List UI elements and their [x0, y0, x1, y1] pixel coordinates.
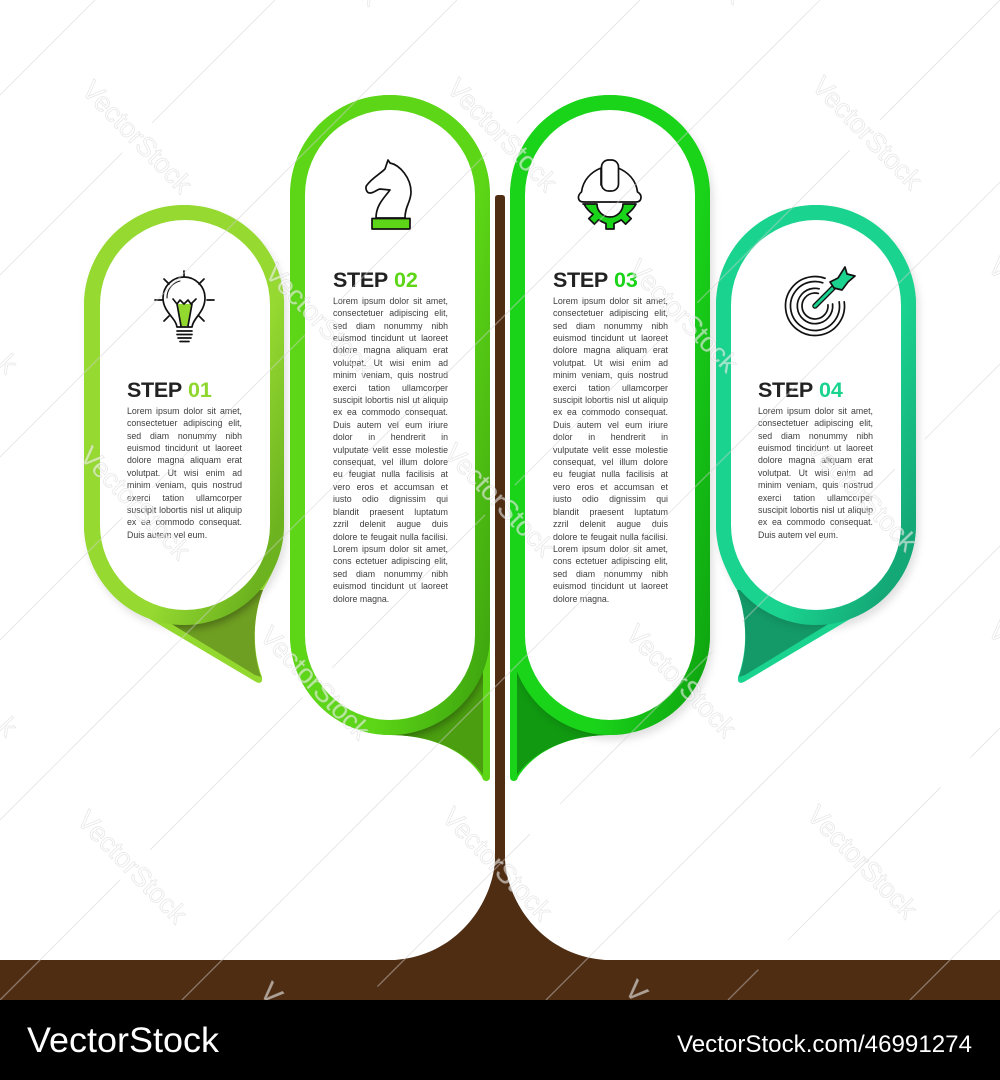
leaf tail: step 01 — [84, 205, 285, 683]
text block: step 02: cons ectetuer adipiscing elit, — [333, 556, 448, 566]
panel: step 02 — [290, 95, 490, 781]
watermark overlay: VectorStock — [806, 71, 928, 196]
watermark overlay: VectorStock — [801, 433, 923, 558]
text block: step 02: dolore magna. — [333, 594, 389, 604]
text block: step 03: cons ectetuer adipiscing elit, — [553, 556, 668, 566]
text block: step 03: eu feugiat nulla facilisis at — [553, 469, 668, 479]
text block: step 02: Lorem ipsum dolor sit amet, — [333, 544, 448, 554]
watermark overlay: VectorStock — [622, 254, 744, 379]
text block: step 02: consectetuer adipiscing elit, — [333, 308, 448, 318]
text block: step 04: minim veniam, quis nostrud — [758, 480, 873, 490]
text block: step 04 — [758, 406, 873, 540]
text block: step 01: Duis autem vel eum. — [127, 530, 207, 540]
text block: step 04: euismod tincidunt ut laoreet — [758, 443, 873, 453]
watermark overlay: VectorStock — [436, 802, 558, 927]
text block: step 01: ex ea commodo consequat. — [127, 517, 242, 527]
panel: step 01 — [84, 205, 290, 683]
text block: step 03: Duis autem vel eum iriure — [553, 420, 668, 430]
watermark overlay: VectorStock — [74, 441, 196, 566]
ring: step 04 — [716, 205, 916, 625]
text block: step 02: Lorem ipsum dolor sit amet, — [333, 296, 448, 306]
text block: step 01 — [127, 406, 242, 540]
text block: step 03: vulputate velit esse molestie — [553, 445, 668, 455]
text block: step 02: suscipit lobortis nisl ut aliquip — [333, 395, 448, 405]
text block: step 03: suscipit lobortis nisl ut aliquip — [553, 395, 668, 405]
text block: step 01: sed diam nonummy nibh — [127, 431, 242, 441]
watermark overlay: VectorStock — [71, 805, 193, 930]
text block: step 04: Duis autem vel eum. — [758, 530, 838, 540]
text block: step 01: dolore magna aliquam erat — [127, 455, 242, 465]
text block: step 01: euismod tincidunt ut laoreet — [127, 443, 242, 453]
text block: step 02: dolore te feugait nulla facilisi. — [333, 532, 448, 542]
text block: step 03: vero eros et accumsan et — [553, 482, 668, 492]
leaf tail: step 03 — [510, 95, 711, 781]
text block: step 03: minim veniam, quis nostrud — [553, 370, 668, 380]
watermark overlay: VectorStock — [441, 73, 563, 198]
icon: chess knight — [366, 160, 411, 229]
text block: step 02: sed diam nonummy nibh — [333, 321, 448, 331]
text block: step 01: consectetuer adipiscing elit, — [127, 418, 242, 428]
text block: step 01: Lorem ipsum dolor sit amet, — [127, 406, 242, 416]
text block: step 02: sed diam nonummy nibh — [333, 569, 448, 579]
watermark overlay: VectorStock — [76, 75, 198, 200]
text block: step 03: dolore magna aliquam erat — [553, 345, 668, 355]
text block: step 02: euismod tincidunt ut laoreet — [333, 581, 448, 591]
text block: step 02: consequat, vel illum dolore — [333, 457, 448, 467]
panel: step 03 — [510, 95, 716, 781]
text block: step 03: blandit praesent luptatum — [553, 507, 668, 517]
text block: step 04: exerci tation ullamcorper — [758, 493, 873, 503]
text block: step 03: exerci tation ullamcorper — [553, 383, 668, 393]
ring: step 02 — [290, 95, 490, 735]
icon: helmet and gear — [578, 160, 641, 229]
text block: step 04: volutpat. Ut wisi enim ad — [758, 468, 873, 478]
heading: step 04: STEP 04 — [758, 378, 843, 402]
text block: step 02: vero eros et accumsan et — [333, 482, 448, 492]
footer band — [0, 1000, 1000, 1080]
text block: step 01: suscipit lobortis nisl ut aliquip — [127, 505, 242, 515]
text block: step 02: dolor in hendrerit in — [333, 432, 448, 442]
footer logo text: VectorStock — [27, 1021, 220, 1060]
watermark overlay: VectorStock — [620, 619, 742, 744]
text block: step 02: eu feugiat nulla facilisis at — [333, 469, 448, 479]
text block: step 02: euismod tincidunt ut laoreet — [333, 333, 448, 343]
ring: step 01 — [84, 205, 284, 625]
text block: step 04: consectetuer adipiscing elit, — [758, 418, 873, 428]
leaf tail: step 02 — [290, 95, 491, 781]
text block: step 03: dolore magna. — [553, 594, 609, 604]
text block: step 04: sed diam nonummy nibh — [758, 431, 873, 441]
watermark overlay: VectorStock — [438, 438, 560, 563]
text block: step 04: suscipit lobortis nisl ut aliquip — [758, 505, 873, 515]
text block: step 01: volutpat. Ut wisi enim ad — [127, 468, 242, 478]
text block: step 02: dolore magna aliquam erat — [333, 345, 448, 355]
panel: step 04 — [716, 205, 922, 683]
text block: step 03: sed diam nonummy nibh — [553, 321, 668, 331]
text block: step 02: exerci tation ullamcorper — [333, 383, 448, 393]
text block: step 03: volutpat. Ut wisi enim ad — [553, 358, 668, 368]
text block: step 03: consectetuer adipiscing elit, — [553, 308, 668, 318]
text block: step 02: iusto odio dignissim qui — [333, 494, 448, 504]
heading: step 02: STEP 02 — [333, 268, 418, 292]
text block: step 04: dolore magna aliquam erat — [758, 455, 873, 465]
watermark overlay: VectorStock — [254, 621, 376, 746]
text block: step 02: minim veniam, quis nostrud — [333, 370, 448, 380]
text block: step 02: Duis autem vel eum iriure — [333, 420, 448, 430]
icon: light bulb — [155, 271, 214, 342]
text block: step 03: Lorem ipsum dolor sit amet, — [553, 544, 668, 554]
text block: step 03: consequat, vel illum dolore — [553, 457, 668, 467]
text block: step 02: volutpat. Ut wisi enim ad — [333, 358, 448, 368]
text block: step 02: zzril delenit augue duis — [333, 519, 448, 529]
text block: step 02: ex ea commodo consequat. — [333, 407, 448, 417]
watermark overlay: VectorStock — [801, 800, 923, 925]
text block: step 02: blandit praesent luptatum — [333, 507, 448, 517]
text block: step 01: minim veniam, quis nostrud — [127, 480, 242, 490]
text block: step 03 — [553, 296, 668, 604]
text block: step 03: Lorem ipsum dolor sit amet, — [553, 296, 668, 306]
text block: step 01: exerci tation ullamcorper — [127, 493, 242, 503]
heading: step 01: STEP 01 — [127, 378, 212, 402]
text block: step 03: dolore te feugait nulla facilisi. — [553, 532, 668, 542]
text block: step 03: ex ea commodo consequat. — [553, 407, 668, 417]
text block: step 03: euismod tincidunt ut laoreet — [553, 333, 668, 343]
text block: step 03: euismod tincidunt ut laoreet — [553, 581, 668, 591]
watermark overlay: VectorStock — [259, 258, 381, 383]
text block: step 03: iusto odio dignissim qui — [553, 494, 668, 504]
footer image id text: VectorStock.com/46991274 — [677, 1031, 972, 1058]
icon: target with arrow — [782, 267, 855, 339]
text block: step 04: Lorem ipsum dolor sit amet, — [758, 406, 873, 416]
text block: step 04: ex ea commodo consequat. — [758, 517, 873, 527]
text block: step 02: vulputate velit esse molestie — [333, 445, 448, 455]
text block: step 03: sed diam nonummy nibh — [553, 569, 668, 579]
text block: step 03: zzril delenit augue duis — [553, 519, 668, 529]
ring: step 03 — [510, 95, 710, 735]
heading: step 03: STEP 03 — [553, 268, 638, 292]
text block: step 02 — [333, 296, 448, 604]
leaf tail: step 04 — [716, 205, 917, 683]
text block: step 03: dolor in hendrerit in — [553, 432, 668, 442]
